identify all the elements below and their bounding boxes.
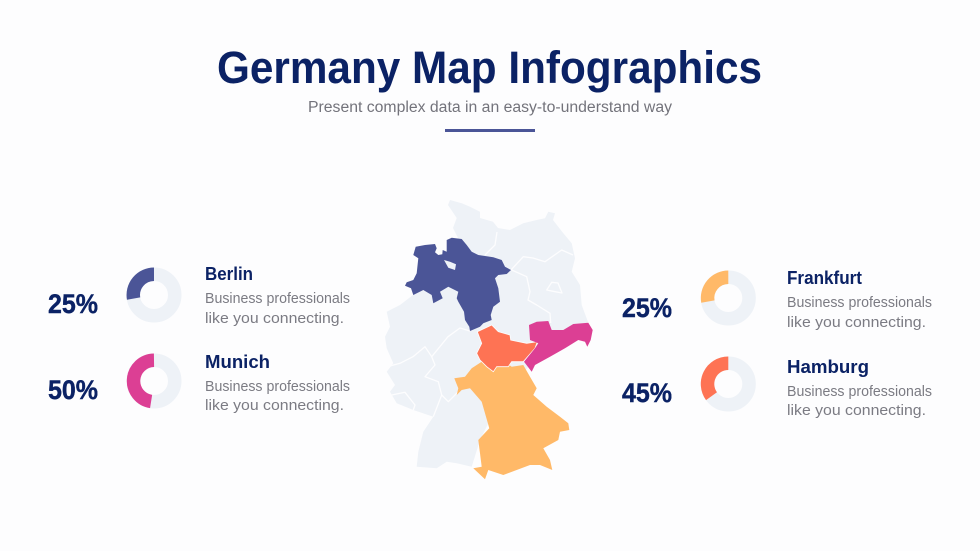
Frankfurt text	[787, 268, 932, 331]
Berlin donut chart	[133, 274, 175, 316]
Frankfurt percentage: 25%	[622, 293, 672, 323]
map: Lower Saxony region	[405, 238, 511, 331]
Munich text: like you connecting.	[205, 397, 344, 414]
Berlin text	[205, 264, 350, 327]
Berlin text: Berlin	[205, 264, 253, 284]
map: internal state borders	[390, 232, 573, 417]
Munich donut chart	[133, 360, 175, 402]
panel: Frankfurt	[622, 268, 932, 331]
Munich percentage: 50%	[48, 375, 98, 405]
Frankfurt donut chart	[708, 277, 749, 319]
map: Thuringia region	[477, 325, 537, 372]
subtitle: Present complex data in an easy-to-understand way	[308, 99, 672, 116]
map: grey base states	[385, 200, 588, 468]
Hamburg text	[787, 357, 932, 419]
heading underline	[445, 129, 535, 132]
map: Saxony region	[524, 321, 593, 372]
Munich text: Munich	[205, 352, 270, 372]
Frankfurt text: Business professionals	[787, 294, 932, 311]
Hamburg text: like you connecting.	[787, 402, 926, 419]
Berlin text: like you connecting.	[205, 310, 344, 327]
panel: Munich	[48, 352, 350, 414]
Munich text: Business professionals	[205, 378, 350, 395]
map of Germany	[385, 200, 593, 479]
Frankfurt text: Frankfurt	[787, 268, 862, 288]
Hamburg text: Business professionals	[787, 383, 932, 400]
Munich text	[205, 352, 350, 414]
map: Bavaria region	[454, 362, 569, 479]
panel: Berlin	[48, 264, 350, 327]
Berlin text: Business professionals	[205, 290, 350, 307]
Hamburg percentage: 45%	[622, 378, 672, 408]
Hamburg text: Hamburg	[787, 357, 869, 377]
title: Germany Map Infographics	[217, 42, 762, 93]
Berlin percentage: 25%	[48, 289, 98, 319]
Frankfurt text: like you connecting.	[787, 314, 926, 331]
panel: Hamburg	[622, 357, 932, 419]
Hamburg donut chart	[708, 363, 749, 405]
